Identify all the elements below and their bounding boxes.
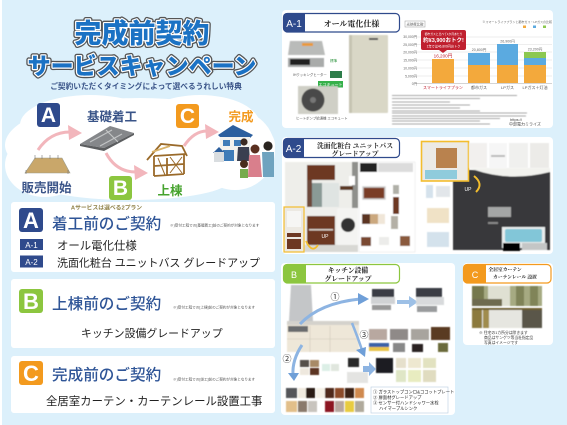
- tag A-2: [20, 256, 43, 268]
- badge C: C: [180, 105, 195, 128]
- title: 完成前契約: [74, 18, 210, 49]
- label: green tags: エコキュート: [318, 82, 342, 87]
- badge C: [19, 361, 43, 386]
- header A-2: 洗面化粧台 ユニットバス: [317, 141, 393, 150]
- photo: water heater tank: [349, 35, 388, 113]
- bar chart: running costs: [403, 35, 552, 90]
- icon: foundation: [80, 126, 134, 151]
- chart legend: [482, 19, 552, 28]
- legend: kitchen items: [371, 387, 454, 413]
- footnote C: ※)受付工程での[竣工]前のご契約が対象となります: [173, 376, 256, 382]
- arrow 3: [352, 323, 366, 357]
- label: foundation work: 基礎着工: [87, 109, 137, 124]
- item A-2: 洗面化粧台 ユニットバス グレードアップ: [57, 256, 260, 270]
- swatches: door materials: [286, 360, 364, 412]
- header A-2: [283, 138, 400, 158]
- badge B: [109, 176, 132, 200]
- header B: キッチン設備: [328, 266, 368, 274]
- item C: 全居室カーテン・カーテンレール設置工事: [46, 394, 262, 408]
- source note: [509, 117, 541, 126]
- badge A: [37, 103, 60, 127]
- arrow: sales to foundation: [38, 125, 82, 150]
- icon: UP arrow vanity: [306, 234, 329, 249]
- subtitle: ご契約いただくタイミングによって選べるうれしい特典: [50, 81, 242, 91]
- header A-1: A-1: [286, 19, 302, 30]
- gallery: cooking photos: [369, 327, 450, 352]
- panel: A-2 vanity and bath: [282, 137, 553, 254]
- badge A: [19, 208, 43, 233]
- bar chart: running costs: スマートライフプラン: [423, 84, 463, 90]
- title: [28, 18, 256, 79]
- legend: kitchen items: ② 扉面材グレードアップ: [373, 394, 422, 401]
- title: サービスキャンペーン: [28, 53, 256, 79]
- heading C: 完成前のご契約: [52, 366, 161, 384]
- title: 完成前契約: [74, 18, 210, 49]
- caption: curtains note: ※ 住宅の1カ所分は除きます: [479, 330, 528, 335]
- item B: キッチン設備グレードアップ: [81, 326, 223, 340]
- source note: https://: [510, 117, 523, 122]
- legend: kitchen items: ① ガラストップコンロ&ココットプレート: [373, 388, 454, 396]
- icon: UP arrow bath: [465, 176, 480, 193]
- legend: kitchen items: ハイマープルシンク: [379, 406, 417, 412]
- photo: outdoor unit: [298, 86, 338, 114]
- label: green tags: [318, 58, 343, 88]
- caption: curtains note: 写真はイメージです: [484, 340, 518, 345]
- highlight: vanity option: [284, 207, 304, 252]
- photo: curtains 1: [472, 286, 542, 306]
- photo: grade-up inset: [422, 142, 468, 181]
- caption: curtains note: [479, 330, 534, 345]
- bar chart: running costs: LPガス: [501, 84, 514, 90]
- bar chart: running costs: 26,900円: [500, 40, 515, 44]
- brochure: vanity options: [359, 162, 415, 252]
- footnote A: ※)受付工程での[基礎着工]前のご契約が対象となります: [170, 222, 260, 228]
- arrow: foundation to framing: [106, 153, 148, 180]
- icon: empty land: [25, 155, 70, 174]
- badge B: B: [23, 289, 39, 314]
- badge C: [176, 104, 199, 128]
- panel: C curtains: [463, 263, 553, 345]
- bar chart: running costs: 15,000円: [403, 58, 418, 62]
- marker 2: ②: [282, 354, 292, 364]
- header A-1: オール電化仕様: [324, 18, 379, 28]
- leaflet column: [425, 184, 450, 250]
- plan note: Aサービスは選べる2プラン: [71, 204, 142, 212]
- caption: IH: IHクッキングヒーター: [293, 72, 327, 77]
- callout: savings: 1年では46,800円おトク: [427, 44, 460, 48]
- header C: カーテンレール 設置: [493, 274, 537, 280]
- chart title box: [405, 21, 425, 27]
- badge B: [19, 289, 43, 314]
- legend: kitchen items: ③ センサー付ハンドシャワー水栓: [373, 400, 439, 406]
- bar chart: running costs: 25,000円: [403, 43, 418, 47]
- icon: timber frame: [147, 144, 187, 176]
- panel: B before framing: [11, 279, 275, 348]
- header B: グレードアップ: [325, 274, 372, 283]
- label: completed: 完成: [228, 109, 254, 124]
- arrow: framing to completed: [184, 124, 219, 146]
- bar chart: running costs: 0円: [412, 82, 418, 86]
- panel: A before groundbreaking: [11, 202, 275, 272]
- tag A-1: A-1: [25, 241, 38, 250]
- item A-1: オール電化仕様: [57, 238, 137, 252]
- bar chart: running costs: LPガス＋灯油: [523, 84, 547, 90]
- badge B: B: [113, 177, 128, 200]
- photo: IH cooktop: [288, 41, 325, 67]
- heading A: 着工前のご契約: [52, 215, 161, 233]
- icon: house and family: [213, 125, 274, 178]
- marker 1: ①: [330, 292, 340, 302]
- panel: A-1 all-electric: [282, 10, 553, 128]
- photo: kitchen unit: [287, 285, 359, 352]
- panel: C before completion: [11, 356, 275, 413]
- arrow: faucet upgrade: [363, 362, 376, 376]
- photo: washroom: [285, 162, 358, 252]
- tag A-2: A-2: [25, 258, 38, 267]
- process diagram: [21, 103, 274, 200]
- badge C: C: [23, 361, 39, 386]
- marker 3: ③: [359, 330, 369, 340]
- bar chart: running costs: 都市ガス: [471, 84, 487, 90]
- photo: standard bath: [453, 168, 550, 251]
- fine print: [392, 96, 527, 124]
- tag A-1: [20, 239, 43, 250]
- callout: savings: [421, 30, 466, 53]
- colour chips: [469, 143, 549, 168]
- panel: B kitchen: [281, 263, 455, 415]
- chart title box: 光熱費比較: [407, 22, 424, 26]
- icon: UP arrow vanity: UP: [322, 234, 329, 240]
- caption: heat pump: ヒートポンプ給湯機 エコキュート: [296, 116, 348, 120]
- header A-2: グレードアップ: [332, 149, 379, 158]
- bar chart: running costs: 30,000円: [403, 35, 418, 39]
- photo: hob standard: [371, 289, 395, 310]
- icon: UP arrow bath: UP: [465, 187, 472, 193]
- header A-1: [283, 13, 400, 32]
- bar chart: running costs: 23,200円: [528, 48, 543, 52]
- title: サービスキャンペーン: [28, 53, 256, 79]
- bar chart: running costs: 16,200円: [434, 54, 453, 60]
- bar chart: running costs: 10,000円: [403, 66, 418, 70]
- badge A: A: [41, 104, 56, 127]
- arrow 1: [300, 293, 369, 324]
- arrow: hob upgrade: [397, 296, 418, 308]
- header B: B: [291, 270, 297, 280]
- bar chart: running costs: 20,800円: [472, 48, 487, 52]
- chart legend: ※スマートライフプランと都市ガス・LPガスの比較: [482, 19, 552, 24]
- bar chart: running costs: 5,000円: [405, 74, 418, 78]
- header A-2: A-2: [286, 144, 302, 155]
- caption: curtains note: 商品はサンゲツ等当社指定品: [484, 335, 534, 340]
- arrow 2: [288, 345, 302, 381]
- header C: 全居室カーテン: [488, 266, 522, 273]
- label: framing: 上棟: [157, 183, 183, 198]
- source note: 中部電力ミライズ: [509, 120, 541, 126]
- badge A: A: [23, 208, 39, 233]
- label: green tags: 標準: [330, 58, 338, 63]
- photo: curtains 2: [472, 308, 542, 328]
- footnote B: ※)受付工程での[上棟]前のご契約が対象となります: [173, 304, 256, 310]
- bar chart: running costs: 20,000円: [403, 50, 418, 54]
- photo: faucet upgrade: [347, 358, 436, 383]
- callout: savings: 約¥3,900おトク!: [423, 36, 464, 44]
- heading B: 上棟前のご契約: [52, 295, 161, 313]
- photo: hob upgraded: [416, 288, 444, 312]
- cloud background: [5, 95, 275, 200]
- header C: C: [472, 270, 479, 280]
- header B: [283, 264, 400, 283]
- label: sales start: 販売開始: [21, 180, 72, 195]
- callout: savings: 都市ガスと比べて1か月あたり: [425, 32, 463, 36]
- header C: [463, 264, 551, 283]
